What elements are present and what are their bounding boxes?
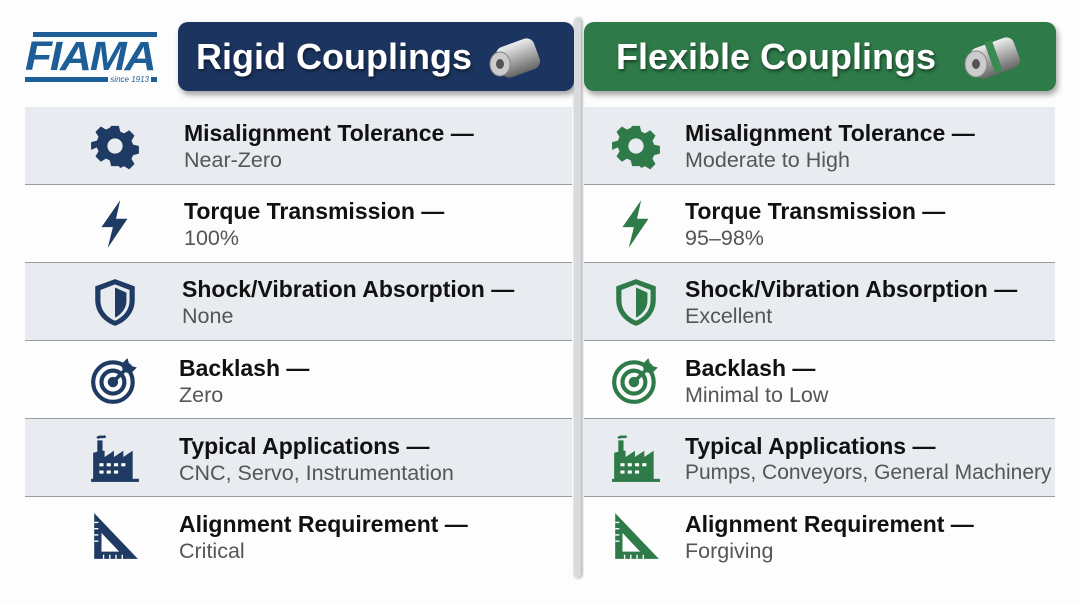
row: alignment flexible: Forgiving bbox=[685, 539, 773, 563]
row: backlash flexible bbox=[584, 341, 1055, 419]
row: torque rigid: 100% bbox=[184, 226, 239, 250]
header: Flexible Couplings: Flexible Couplings bbox=[616, 36, 936, 77]
row: applications rigid: CNC, Servo, Instrumentation bbox=[179, 461, 454, 485]
logo: FIAMA: FIAMA bbox=[25, 33, 154, 79]
icon: rigid coupling bbox=[490, 38, 540, 78]
row: applications flexible: Pumps, Conveyors, General Machinery bbox=[685, 461, 1052, 484]
row: alignment rigid: Alignment Requirement — bbox=[179, 511, 468, 537]
row: misalignment flexible: Misalignment Tolerance — bbox=[685, 120, 975, 146]
row: torque rigid bbox=[25, 185, 572, 263]
row: shock flexible: Shock/Vibration Absorption — bbox=[685, 276, 1017, 302]
row: misalignment flexible: Moderate to High bbox=[685, 148, 850, 172]
icon: flexible coupling bbox=[964, 37, 1020, 79]
row: alignment rigid bbox=[25, 497, 572, 575]
row: torque rigid: Torque Transmission — bbox=[184, 198, 444, 224]
row: applications flexible: Typical Applications — bbox=[685, 433, 935, 459]
header: Rigid Couplings bbox=[178, 22, 574, 91]
row: applications rigid bbox=[25, 419, 572, 497]
row: misalignment rigid: Misalignment Tolerance — bbox=[184, 120, 474, 146]
row: shock rigid: Shock/Vibration Absorption — bbox=[182, 276, 514, 302]
row: backlash rigid: Backlash — bbox=[179, 355, 309, 381]
row: misalignment rigid bbox=[25, 107, 572, 185]
divider bbox=[574, 18, 581, 578]
row: shock flexible: Excellent bbox=[685, 304, 772, 328]
row: shock rigid: None bbox=[182, 304, 233, 328]
row: torque flexible: Torque Transmission — bbox=[685, 198, 945, 224]
header: Flexible Couplings bbox=[584, 22, 1056, 91]
row: misalignment rigid: Near-Zero bbox=[184, 148, 282, 172]
row: backlash flexible: Minimal to Low bbox=[685, 383, 828, 407]
row: backlash flexible: Backlash — bbox=[685, 355, 815, 381]
row: alignment rigid: Critical bbox=[179, 539, 245, 563]
row: alignment flexible: Alignment Requirement — bbox=[685, 511, 974, 537]
row: torque flexible: 95–98% bbox=[685, 226, 764, 250]
logo: FIAMA: since 1913 bbox=[110, 75, 149, 84]
header: Rigid Couplings: Rigid Couplings bbox=[196, 36, 472, 77]
row: applications rigid: Typical Applications — bbox=[179, 433, 429, 459]
panel: rigid couplings bbox=[25, 107, 572, 563]
row: misalignment flexible bbox=[584, 107, 1055, 185]
row: torque flexible bbox=[584, 185, 1055, 263]
row: backlash rigid bbox=[25, 341, 572, 419]
row: backlash rigid: Zero bbox=[179, 383, 223, 407]
row: alignment flexible bbox=[584, 497, 1055, 575]
row: applications flexible bbox=[584, 419, 1055, 497]
panel: flexible couplings bbox=[584, 107, 1055, 563]
row: shock rigid bbox=[25, 263, 572, 341]
row: shock flexible bbox=[584, 263, 1055, 341]
